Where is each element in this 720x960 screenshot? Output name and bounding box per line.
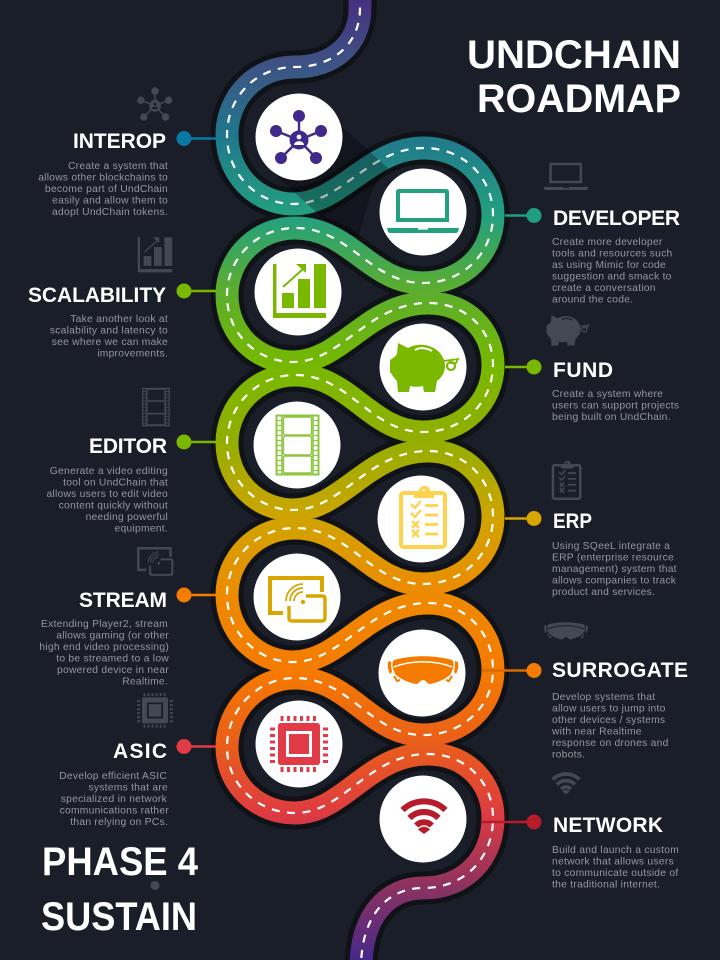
ghost icon: clipboard [553, 461, 580, 499]
text: developer: Create more developer [552, 237, 663, 248]
title [467, 33, 681, 121]
text: erp: product and services. [552, 587, 655, 598]
connector: editor [176, 434, 216, 450]
text: erp: allows companies to track [552, 576, 677, 586]
text: developer: around the code. [552, 294, 633, 306]
text: editor: tool on UndChain that [63, 478, 168, 488]
heading: stream: STREAM [79, 589, 167, 612]
icon: piggy bank circle [380, 324, 466, 410]
heading: interop: INTEROP [73, 130, 166, 153]
ghost icon: wifi [553, 774, 579, 794]
heading: surrogate: SURROGATE [552, 659, 688, 682]
text: interop: become part of UndChain [45, 184, 168, 195]
text: surrogate: robots. [552, 750, 585, 760]
text: asic: Develop efficient ASIC [59, 771, 167, 782]
text: network: the traditional internet. [552, 880, 660, 890]
connector: surrogate [482, 663, 542, 678]
text: surrogate: with near Realtime [551, 726, 642, 738]
step: surrogate [378, 622, 688, 760]
text: stream: high end video processing) [39, 642, 169, 653]
text: fund: Create a system where [552, 389, 663, 400]
step: scalability [28, 237, 342, 360]
heading: erp: ERP [553, 510, 592, 533]
text: interop: easily and allow them to [52, 196, 168, 206]
text: stream: Extending Player2, stream [41, 619, 168, 630]
heading: fund: FUND [553, 359, 613, 382]
step: fund [380, 315, 679, 423]
ghost icon: bar chart [138, 237, 172, 272]
ghost icon: network nodes [137, 87, 172, 121]
text: surrogate: Develop systems that [552, 692, 655, 703]
text: scalability: Take another look at [70, 314, 168, 325]
text: stream: allows gaming (or other [56, 630, 169, 642]
ghost icon: stream [138, 548, 172, 575]
step: developer [380, 163, 680, 306]
text: asic: communications rather [60, 806, 169, 816]
text: editor: allows users to edit video [46, 489, 168, 500]
ghost icon: visor [544, 622, 588, 639]
text: editor: content quickly without [59, 500, 168, 512]
step: editor [46, 388, 340, 534]
text: editor: equipment. [115, 524, 168, 534]
connector: asic [176, 739, 216, 754]
text: asic: systems that are [88, 782, 168, 794]
road: winding path [227, 0, 493, 960]
connector: erp [505, 511, 542, 526]
text: erp: Using SQeeL integrate a [552, 541, 670, 552]
step: asic [59, 693, 342, 828]
ghost icon: laptop [544, 163, 588, 190]
text: erp: ERP (enterprise resource [552, 552, 674, 564]
connector: developer [505, 208, 542, 223]
icon: wifi circle [380, 776, 466, 862]
connector: scalability [176, 284, 216, 298]
icon: bar chart circle [254, 248, 342, 336]
text: asic: than relying on PCs. [70, 817, 168, 828]
text: erp: management) system that [552, 564, 677, 575]
step: network [380, 774, 679, 890]
heading: network: NETWORK [553, 814, 663, 837]
text: stream: to be streamed to a low [56, 654, 169, 664]
text: scalability: scalability and latency to [50, 326, 168, 336]
phase label: PHASE 4 [42, 840, 199, 884]
text: network: network that allows users [552, 856, 674, 868]
icon: visor circle [378, 630, 466, 716]
heading: asic: ASIC [113, 740, 167, 763]
ghost icon: piggy bank [547, 315, 589, 346]
text: developer: create a conversation [552, 283, 656, 294]
text: developer: suggestion and smack to [552, 272, 672, 282]
ghost icon: chip [137, 693, 173, 728]
connector: fund [505, 360, 542, 374]
phase label [41, 840, 199, 939]
text: editor: Generate a video editing [50, 466, 168, 477]
text: scalability: improvements. [97, 348, 168, 360]
icon: laptop circle [380, 168, 466, 256]
step: interop [38, 87, 342, 218]
connector: network [482, 814, 542, 830]
step: stream [39, 548, 340, 688]
text: surrogate: response on drones and [552, 738, 669, 749]
text: fund: being built on UndChain. [552, 412, 671, 423]
text: surrogate: other devices / systems [552, 715, 665, 726]
text: network: Build and launch a custom [552, 845, 679, 856]
icon: interop circle [256, 94, 342, 180]
text: scalability: see where we can make [52, 337, 168, 348]
text: interop: allows other blockchains to [38, 172, 168, 184]
icon: film strip circle [254, 402, 340, 488]
title: UNDCHAIN [467, 33, 681, 77]
text: stream: powered device in near [57, 665, 169, 676]
connector: interop [176, 131, 216, 146]
step: erp [378, 461, 677, 598]
text: editor: needing powerful [86, 512, 168, 523]
text: developer: tools and resources such [552, 248, 672, 260]
text: fund: users can support projects [552, 400, 679, 412]
ghost icon: film strip [143, 388, 169, 426]
heading: developer: DEVELOPER [553, 207, 680, 230]
heading: scalability: SCALABILITY [28, 284, 166, 307]
icon: chip circle [256, 700, 342, 788]
long shadow from interop circle [273, 127, 388, 238]
text: stream: Realtime. [122, 676, 168, 688]
text: asic: specialized in network [61, 794, 168, 805]
heading: editor: EDITOR [89, 435, 167, 458]
icon: clipboard circle [378, 476, 464, 562]
text: interop: adopt UndChain tokens. [52, 207, 168, 218]
text: developer: as using Mimic for code [552, 260, 666, 271]
icon: stream circle [254, 554, 340, 640]
phase label: SUSTAIN [41, 895, 197, 939]
connector: stream [176, 588, 216, 602]
text: surrogate: allow users to jump into [552, 704, 666, 714]
title: ROADMAP [477, 77, 681, 121]
text: network: to communicate outside of [552, 868, 678, 879]
text: interop: Create a system that [68, 161, 168, 172]
